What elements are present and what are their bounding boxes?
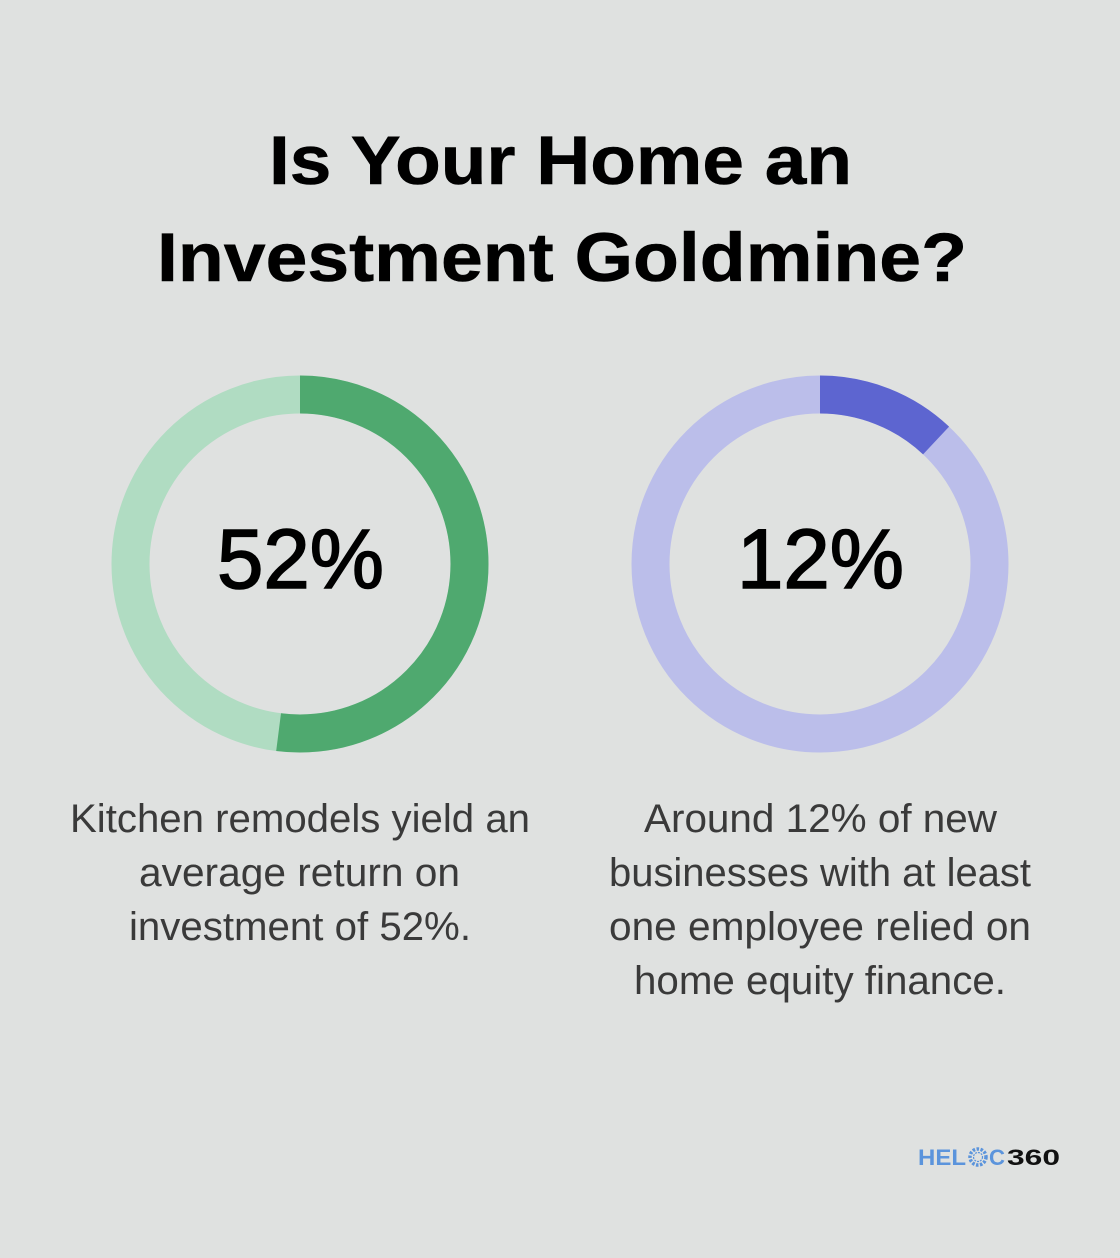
description: new businesses: [609, 797, 1031, 1003]
description: new businesses: businesses with at least: [609, 851, 1031, 895]
description: new businesses: Around 12% of new: [644, 797, 997, 841]
logo: HELOC360: 360: [1007, 1145, 1060, 1170]
description: kitchen remodels: average return on: [139, 851, 460, 895]
donut chart: 52%: [130, 394, 470, 734]
panel: new businesses: [609, 394, 1031, 1003]
logo: HELOC360: [918, 1145, 1060, 1170]
donut chart: 12%: [650, 394, 990, 734]
logo: HELOC360: HEL: [918, 1145, 966, 1170]
icon: swirl: [970, 1149, 986, 1165]
description: new businesses: one employee relied on: [609, 905, 1031, 949]
description: kitchen remodels: investment of 52%.: [129, 905, 471, 949]
value: 12%: 12%: [737, 512, 904, 606]
description: kitchen remodels: [70, 797, 530, 949]
title: Investment Goldmine?: [157, 219, 967, 296]
panel: kitchen remodels: [70, 394, 530, 949]
description: new businesses: home equity finance.: [634, 959, 1006, 1003]
description: kitchen remodels: Kitchen remodels yield an: [70, 797, 530, 841]
title: Is Your Home an: [269, 122, 852, 199]
title: [157, 122, 967, 296]
value: 52%: 52%: [217, 512, 384, 606]
logo: HELOC360: C: [989, 1145, 1005, 1170]
